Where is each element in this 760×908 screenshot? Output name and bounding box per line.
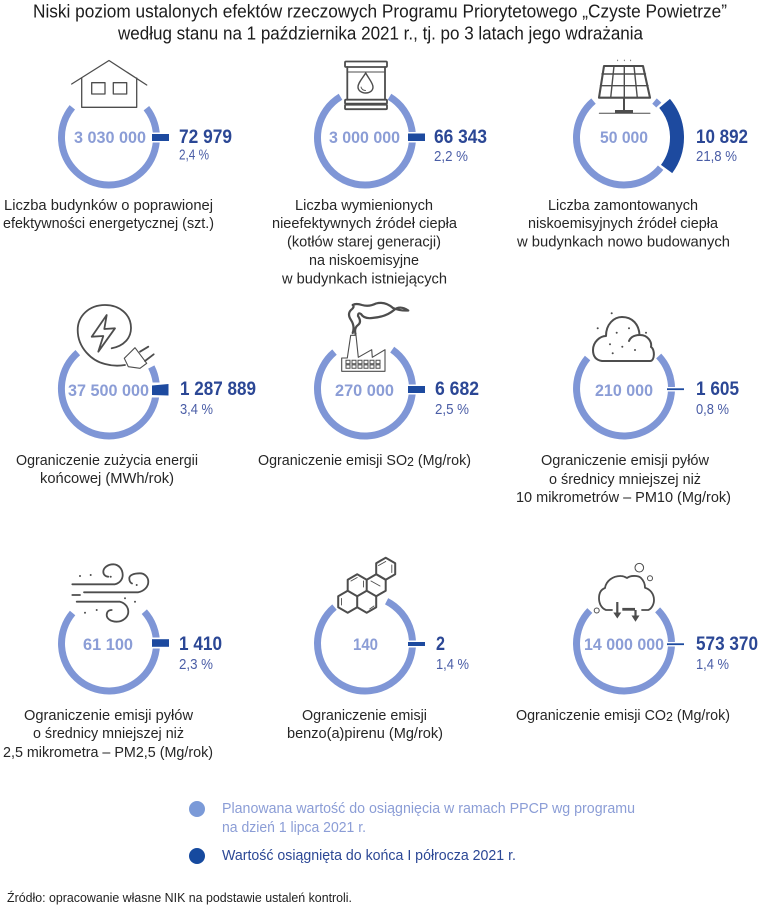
achieved value: 2 [436, 634, 445, 655]
achieved value [179, 127, 232, 164]
description: końcowej (MWh/rok) [40, 470, 174, 487]
title: według stanu na 1 października 2021 r., tj. po 3 latach jego wdrażania [117, 22, 644, 44]
description [272, 197, 458, 288]
achieved value: 3,4 % [180, 401, 213, 418]
description [3, 707, 213, 761]
planned value: 140 [353, 636, 378, 654]
achieved value: 1,4 % [436, 656, 469, 673]
planned value: 14 000 000 [584, 636, 664, 654]
description: Ograniczenie emisji pyłów [541, 452, 709, 469]
achieved value: 1,4 % [696, 656, 729, 673]
achieved value: 2,2 % [434, 148, 468, 165]
ring chart: nowe budynki [576, 101, 677, 185]
ring chart: SO2 [317, 350, 425, 436]
icon: wind [72, 564, 148, 622]
description: w budynkach nowo budowanych [516, 234, 730, 250]
achieved value: 2,4 % [179, 146, 209, 164]
description [16, 452, 198, 487]
icon: oil barrel [345, 62, 387, 109]
description: Ograniczenie emisji pyłów [24, 707, 193, 724]
description: Liczba budynków o poprawionej [4, 197, 213, 214]
icon: cloud with arrows [594, 563, 654, 622]
ring chart: budynki [61, 107, 169, 185]
planned value: 50 000 [600, 129, 648, 147]
description: (Mg/rok) [414, 452, 471, 469]
achieved value: 1 605 [696, 379, 739, 400]
panel: emisja PM2,5 [3, 564, 222, 761]
achieved value [435, 379, 479, 418]
icon: benzopyrene molecule [338, 558, 395, 613]
ring chart: energia [61, 353, 169, 436]
icon: house [72, 60, 147, 107]
description: Liczba zamontowanych [548, 197, 698, 214]
icon: plug with lightning [78, 305, 154, 368]
achieved value: 1 410 [179, 634, 222, 655]
legend: planned value: na dzień 1 lipca 2021 r. [222, 819, 366, 836]
panel: emisja CO2 [516, 563, 758, 724]
panel: emisja benzo(a)pirenu [287, 558, 469, 742]
legend: planned value: Planowana wartość do osiągnięcia w ramach PPCP wg programu [222, 800, 635, 817]
description: Ograniczenie zużycia energii [16, 452, 198, 469]
ring chart: PM2,5 [62, 612, 169, 691]
panel: źródła ciepła w budynkach istniejących [272, 62, 487, 288]
description: 10 mikrometrów – PM10 (Mg/rok) [516, 489, 731, 506]
achieved value: 2,3 % [179, 656, 213, 673]
ring chart: PM10 [577, 356, 684, 436]
description: o średnicy mniejszej niż [33, 725, 184, 742]
achieved value: 6 682 [435, 379, 479, 400]
source note: Źródło: opracowanie własne NIK na podstawie ustaleń kontroli. [7, 890, 352, 905]
description: nieefektywnych źródeł ciepła [272, 215, 458, 232]
planned value: 270 000 [335, 382, 394, 400]
ring chart: wymiana [317, 97, 425, 185]
description [3, 197, 214, 232]
planned value: 210 000 [595, 382, 653, 400]
description: benzo(a)pirenu (Mg/rok) [287, 725, 443, 742]
achieved value [436, 634, 469, 673]
description: 2 [666, 709, 673, 724]
planned value: 3 030 000 [74, 129, 146, 147]
achieved value [696, 634, 758, 673]
description: 2 [407, 454, 414, 469]
legend: achieved value: Wartość osiągnięta do końca I półrocza 2021 r. [222, 847, 516, 864]
achieved value: 21,8 % [696, 148, 737, 165]
panel: emisja PM10 [516, 312, 739, 506]
icon: solar panel [599, 60, 650, 113]
icon: dust cloud [593, 312, 654, 361]
panel: emisja SO2 [258, 303, 479, 469]
achieved value: 2,5 % [435, 401, 469, 418]
achieved value [696, 127, 748, 165]
description [287, 707, 443, 742]
icon: factory with smoke [342, 303, 408, 371]
planned value: 61 100 [83, 636, 133, 654]
description: (kotłów starej generacji) [287, 234, 441, 250]
ring chart: CO2 [576, 610, 684, 691]
description: na niskoemisyjne [309, 252, 419, 269]
legend [189, 800, 635, 864]
panel: budynki [3, 60, 232, 232]
title: Niski poziom ustalonych efektów rzeczowych Programu Priorytetowego „Czyste Powietrze” [33, 0, 727, 22]
title [33, 0, 727, 44]
panel: zużycie energii [16, 305, 256, 487]
achieved value: 66 343 [434, 127, 487, 148]
achieved value: 72 979 [179, 127, 232, 148]
panel: źródła ciepła w budynkach nowych [516, 60, 748, 250]
description: w budynkach istniejących [281, 270, 447, 288]
achieved value [434, 127, 487, 165]
description [516, 452, 731, 506]
planned value: 3 000 000 [329, 129, 400, 147]
description: Ograniczenie emisji SO [258, 452, 415, 469]
achieved value: 0,8 % [696, 401, 729, 418]
achieved value [696, 379, 739, 418]
achieved value [180, 379, 256, 418]
description: Ograniczenie emisji CO [516, 707, 674, 724]
description: Liczba wymienionych [295, 197, 433, 214]
description: Ograniczenie emisji [302, 707, 427, 724]
legend: planned value [189, 800, 635, 836]
description [516, 197, 730, 250]
description: efektywności energetycznej (szt.) [3, 215, 214, 232]
description: (Mg/rok) [673, 707, 730, 724]
achieved value: 10 892 [696, 127, 748, 148]
achieved value [179, 634, 222, 673]
planned value: 37 500 000 [68, 382, 149, 400]
achieved value: 1 287 889 [180, 379, 256, 400]
ring chart: benzo(a)piren [318, 601, 425, 691]
description: 2,5 mikrometra – PM2,5 (Mg/rok) [3, 744, 213, 761]
description: o średnicy mniejszej niż [549, 471, 701, 488]
description: niskoemisyjnych źródeł ciepła [528, 215, 719, 232]
